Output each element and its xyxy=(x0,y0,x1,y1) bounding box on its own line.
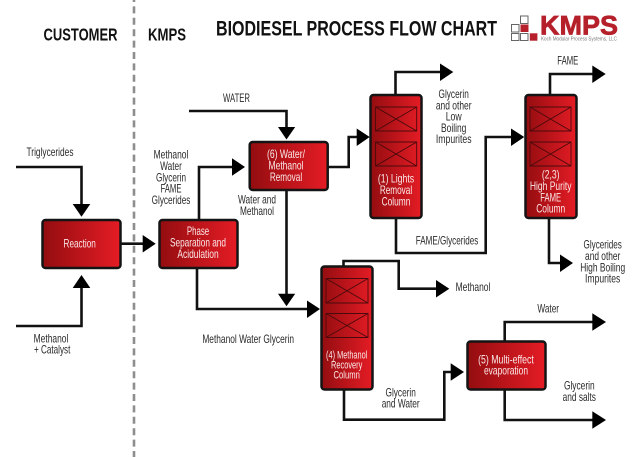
label: glycerin and salts: Glycerin xyxy=(564,380,595,393)
column: high purity FAME: (2,3) xyxy=(542,169,560,182)
box: multi-effect evaporation: evaporation xyxy=(484,365,528,378)
label: glycerin and salts: and salts xyxy=(563,391,596,404)
label: methanol and catalyst xyxy=(34,332,71,357)
box: reaction xyxy=(42,220,120,268)
heading: customer: CUSTOMER xyxy=(44,24,118,44)
column: lights removal: Column xyxy=(382,196,410,208)
box: water methanol removal: Methanol xyxy=(268,160,304,173)
label: FAME: FAME xyxy=(557,55,578,68)
arrow: triglycerides to reaction xyxy=(16,167,90,217)
arrow: phase separation to water methanol removal xyxy=(199,158,245,220)
logo: KMPS: KMPS xyxy=(540,10,618,40)
column: high purity FAME: High Purity xyxy=(530,180,572,193)
label: water and methanol: Methanol xyxy=(240,205,274,218)
arrow: methanol and catalyst to reaction xyxy=(16,275,90,326)
label: water and methanol: Water and xyxy=(238,194,276,207)
box: reaction: Reaction xyxy=(64,238,96,251)
column: lights removal: Removal xyxy=(380,184,412,197)
box: water methanol removal: (6) Water/ xyxy=(267,148,306,161)
column: high purity FAME: Column xyxy=(536,203,565,216)
label: FAME/glycerides: FAME/Glycerides xyxy=(416,234,478,247)
label: glycerin and low boiling impurities: Impurites xyxy=(436,133,472,146)
column: lights removal xyxy=(370,95,422,218)
label: glycerides and high boiling impurities: Impurites xyxy=(585,273,620,286)
label: glycerin and water: and Water xyxy=(382,398,420,410)
label: phase separation top products: Glycerides xyxy=(152,194,190,207)
label: glycerin and water: Glycerin xyxy=(386,386,416,399)
label: glycerin and low boiling impurities: Glycerin xyxy=(439,88,469,101)
logo: KMPS: Koch Modular Process Systems, LLC xyxy=(541,36,617,42)
label: glycerin and salts xyxy=(563,380,596,404)
arrow: phase separation to methanol recovery column xyxy=(197,268,320,318)
label: glycerin and low boiling impurities: Low xyxy=(446,110,462,124)
arrow: glycerin and water to evaporation xyxy=(344,363,464,420)
box: multi-effect evaporation xyxy=(468,342,546,390)
arrow: water output xyxy=(505,313,606,341)
column: methanol recovery: (4) Methanol xyxy=(326,349,367,361)
label: methanol and catalyst: + Catalyst xyxy=(34,344,71,357)
box: multi-effect evaporation: (5) Multi-effect xyxy=(478,353,534,366)
arrow: water and methanol down xyxy=(278,190,295,306)
box: water methanol removal xyxy=(250,142,328,190)
arrow: water methanol removal to lights column xyxy=(328,128,370,167)
label: glycerin and low boiling impurities xyxy=(436,88,472,146)
label: phase separation top products: Water xyxy=(160,160,182,173)
box: phase separation and acidulation xyxy=(160,220,238,268)
arrow: water input xyxy=(189,111,295,140)
column: methanol recovery: Column xyxy=(334,370,360,382)
logo: KMPS xyxy=(512,10,618,42)
label: glycerin and low boiling impurities: and other xyxy=(436,99,472,112)
label: glycerides and high boiling impurities: and other xyxy=(585,250,620,263)
arrow: lights column top output xyxy=(396,64,453,94)
arrow: glycerin and salts output xyxy=(505,390,606,429)
arrow: high boiling impurities output xyxy=(549,218,573,272)
box: phase separation and acidulation: Separation and xyxy=(170,237,226,250)
label: glycerides and high boiling impurities: Glycerides xyxy=(584,239,622,252)
column: high purity FAME xyxy=(526,95,576,218)
arrow: FAME output xyxy=(550,66,606,94)
column: high purity FAME: FAME xyxy=(540,191,561,204)
column: lights removal: (1) Lights xyxy=(378,173,414,186)
label: glycerides and high boiling impurities xyxy=(580,239,625,286)
label: methanol water glycerin: Methanol Water Glycerin xyxy=(202,333,294,346)
label: triglycerides: Triglycerides xyxy=(26,146,74,159)
label: water and methanol xyxy=(238,194,276,218)
column: methanol recovery: Recovery xyxy=(331,360,363,372)
arrow: reaction to phase separation xyxy=(120,235,156,252)
label: phase separation top products: Methanol xyxy=(154,148,188,162)
arrow: FAME/glycerides to high purity column xyxy=(396,128,524,253)
label: water: WATER xyxy=(223,92,250,105)
arrow: methanol output xyxy=(344,261,449,298)
label: methanol output: Methanol xyxy=(456,281,490,294)
label: glycerin and low boiling impurities: Boiling xyxy=(441,122,466,135)
label: phase separation top products: FAME xyxy=(160,182,182,196)
label: methanol and catalyst: Methanol xyxy=(34,332,68,345)
box: phase separation and acidulation: Phase xyxy=(187,225,209,238)
label: water output: Water xyxy=(537,303,559,316)
label: phase separation top products xyxy=(152,148,190,207)
box: phase separation and acidulation: Acidulation xyxy=(177,248,219,261)
box: water methanol removal: Removal xyxy=(270,171,302,184)
label: phase separation top products: Glycerin xyxy=(156,171,186,184)
column: methanol recovery xyxy=(322,266,372,390)
heading: KMPS: KMPS xyxy=(148,24,186,44)
label: glycerin and water xyxy=(382,386,420,410)
title: BIODIESEL PROCESS FLOW CHART xyxy=(216,18,497,41)
